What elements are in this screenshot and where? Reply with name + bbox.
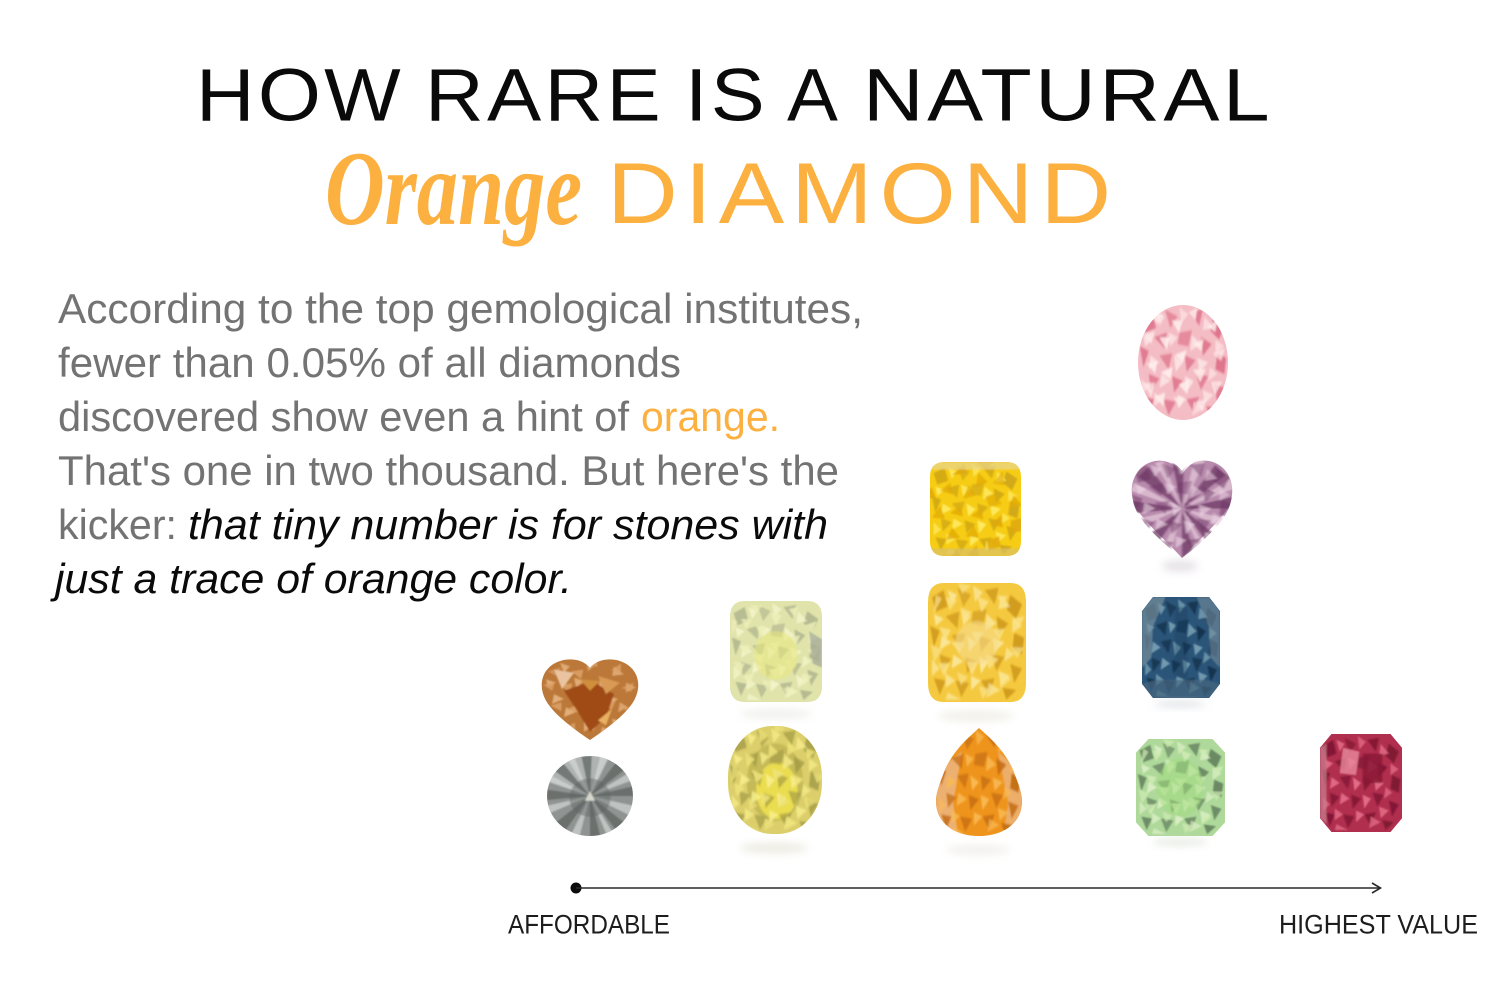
diamond: golden cushion — [928, 583, 1026, 702]
title line: how rare is a natural: A — [787, 54, 841, 136]
diamond: vivid yellow cushion — [930, 462, 1021, 556]
reflection: blue radiant — [1154, 701, 1206, 707]
reflection: pale yellow cushion — [740, 709, 812, 719]
diamond: yellow oval — [728, 726, 822, 834]
reflection: golden cushion — [938, 710, 1014, 722]
diamond: pink oval — [1138, 305, 1228, 420]
body text block — [50, 285, 863, 602]
axis start dot — [570, 882, 582, 894]
axis label: affordable: AFFORDABLE — [508, 910, 670, 940]
diamond: red radiant — [1320, 734, 1402, 832]
diamond: orange pear — [936, 728, 1022, 836]
emphasised sentence, second line: just a trace of orange color. — [50, 555, 572, 602]
reflection: green radiant — [1152, 838, 1208, 846]
reflection: yellow oval — [740, 842, 808, 854]
arrow head — [1372, 883, 1380, 893]
title — [196, 54, 1273, 247]
title word: Orange: Orange — [325, 130, 582, 247]
reflection: orange pear — [946, 845, 1010, 855]
body line 5 lead-in: kicker: — [58, 501, 177, 548]
diamond: green radiant — [1136, 739, 1226, 836]
value axis arrow — [570, 882, 1380, 894]
diamond: brown heart — [542, 659, 638, 740]
title line: how rare is a natural: NATURAL — [863, 54, 1273, 136]
diamond: purple heart — [1130, 459, 1234, 558]
body line 3: discovered show even a hint of — [58, 393, 629, 440]
title line: how rare is a natural: IS — [685, 54, 768, 136]
axis line — [576, 887, 1380, 889]
body line 2: fewer than 0.05% of all diamonds — [58, 339, 681, 386]
diamond: pale yellow cushion — [730, 601, 822, 702]
highlighted word: orange: orange. — [641, 393, 780, 440]
title word: DIAMOND: DIAMOND — [607, 146, 1118, 242]
title line: how rare is a natural: HOW — [196, 54, 404, 136]
diamond: blue radiant — [1142, 597, 1220, 698]
body line 4: That's one in two thousand. But here's the — [58, 447, 839, 494]
reflection: purple heart — [1162, 560, 1198, 572]
body line 1: According to the top gemological institutes, — [58, 285, 863, 332]
title line: how rare is a natural: RARE — [425, 54, 664, 136]
title line: how rare is a natural — [196, 54, 1273, 136]
diamond: grey round — [547, 753, 633, 836]
axis label: highest value: HIGHEST VALUE — [1279, 910, 1478, 940]
emphasised sentence, first line: that tiny number is for stones with — [188, 501, 828, 548]
